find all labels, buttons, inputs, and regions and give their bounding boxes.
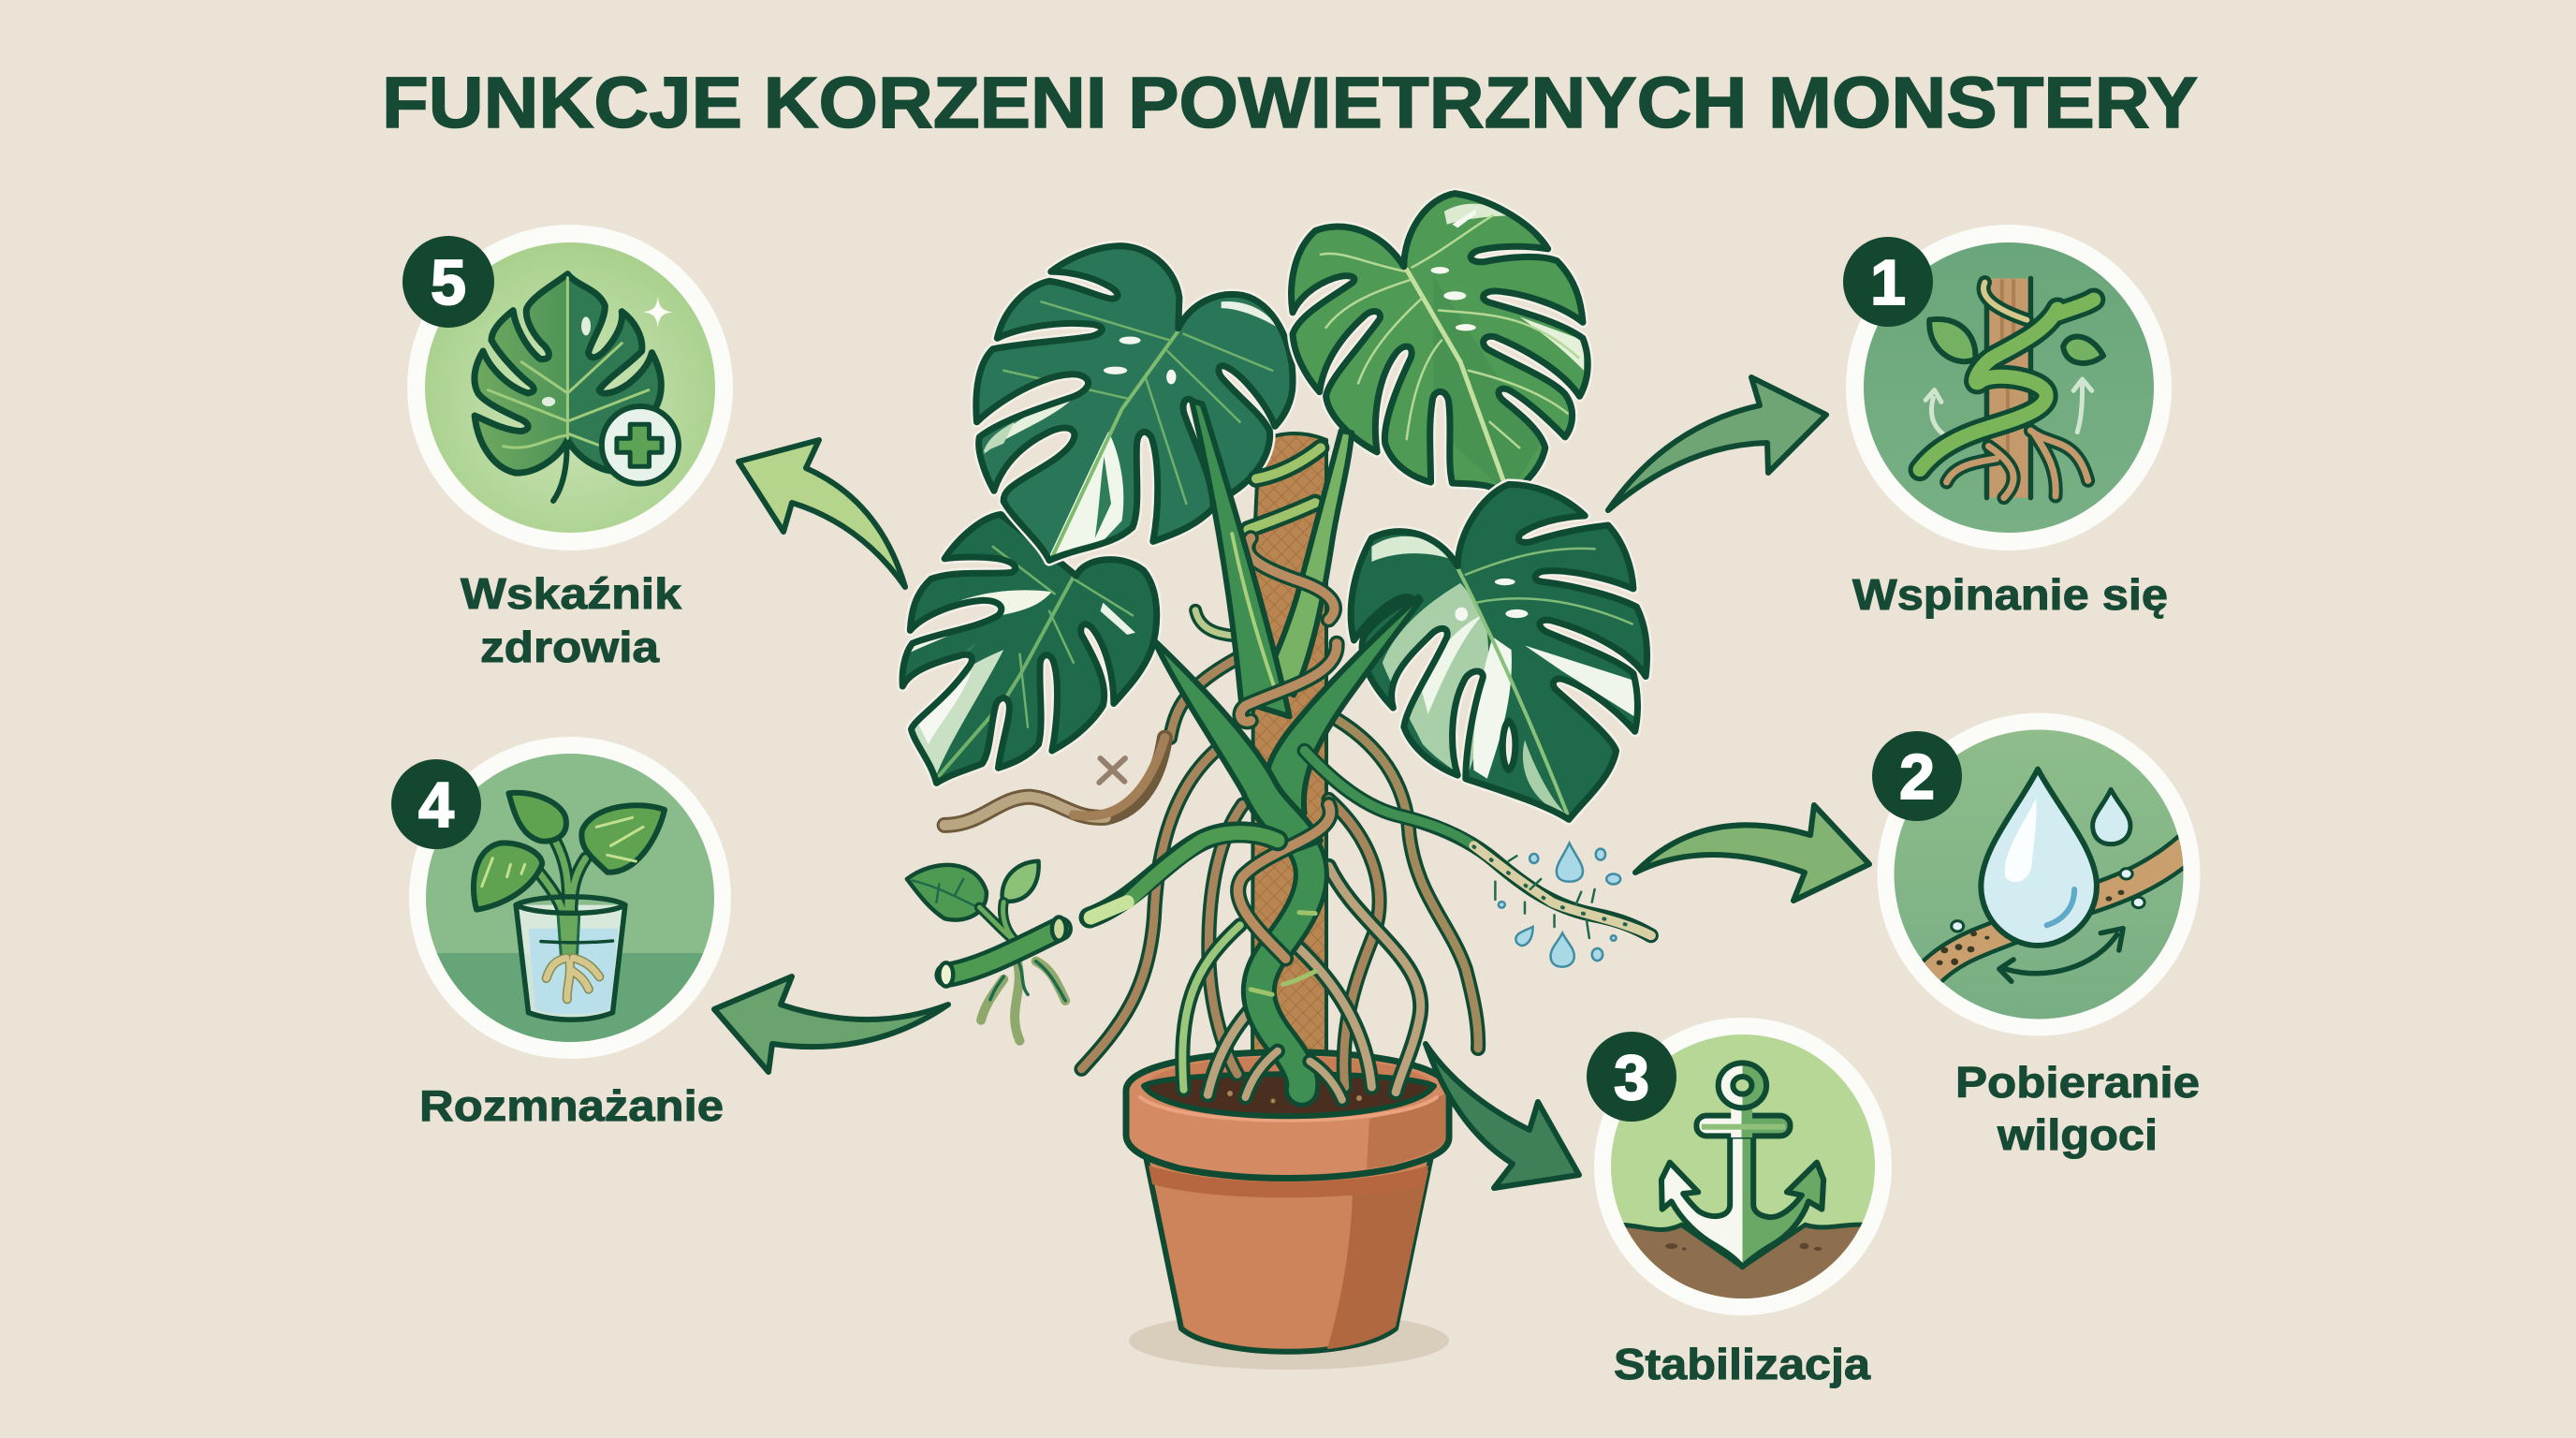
badge 3 [1587,1032,1676,1122]
plus badge [602,406,679,484]
label: Wskaźnik [461,569,681,618]
roots [1947,431,2088,498]
rim inner back [1144,1056,1434,1114]
inner disc [425,242,715,533]
leaf stem [553,443,566,501]
double arrow [1999,929,2123,981]
plant stems [537,841,586,911]
pot body [1146,1156,1431,1352]
soil [1618,1225,1872,1304]
left leaf [1929,319,1975,361]
leaf spots [1455,579,1528,621]
twisted brown root [1238,804,1330,959]
rim shade [1367,1093,1445,1169]
inner disc [426,754,714,1042]
big drop [1981,770,2097,946]
panel 3: stabilization [1587,1018,1892,1388]
icon: leaf with plus [475,274,679,501]
inner disc [1611,1034,1875,1299]
inner disc [1864,242,2154,533]
stem in water [558,913,579,961]
icon drops and arrow [1952,770,2144,981]
pot rim [1126,1052,1449,1178]
label [461,569,681,671]
arrow to 4 [714,976,948,1072]
badge 2 [1872,731,1962,821]
pole [1986,278,2030,498]
badge 4: 4 [418,770,454,841]
anchor stock [1696,1116,1790,1136]
petiole right leaf [1266,597,1421,839]
label: Pobieranie [1955,1058,2200,1107]
small drop [2093,789,2130,844]
leaf top right [1292,194,1588,497]
title: FUNKCJE KORZENI POWIETRZNYCH MONSTERY [382,63,2198,143]
pot body shade [1327,1170,1428,1349]
tapered stem upper [1154,640,1321,854]
pale arrows [1925,379,2092,433]
leaf spots [542,316,591,406]
leaf top left [976,246,1293,562]
icon: vine on pole [1920,278,2103,498]
soil crumbs [1227,1091,1362,1103]
dead root with x mark [944,738,1164,825]
badge 4 [391,759,481,849]
badge 1 [1843,237,1933,327]
dry root [944,738,1164,825]
root bubbles [1952,869,2144,932]
petiole top right leaf [1265,431,1352,695]
table band [436,953,704,1042]
right leaf [2063,337,2103,363]
sparkle [643,297,673,328]
arrow to 2 [1635,805,1869,901]
inner right root [1328,800,1380,1087]
root pores [1937,890,2124,965]
panel 1: climbing [1843,225,2172,619]
glass outline [516,905,625,1020]
small cut root [1195,610,1237,636]
moss pole [1252,433,1326,1091]
panel 5: health indicator [402,225,733,671]
pole wraps and petioles [1192,401,1421,839]
badge 5 [402,236,494,328]
badge 1: 1 [1870,247,1906,318]
drop highlight [2005,799,2036,882]
white ring [407,225,733,550]
root [1925,843,2192,980]
leaf spots [1431,210,1476,331]
leaf 3 [474,843,542,910]
inner left root [1208,804,1243,1074]
soil [1144,1074,1434,1116]
pot shadow [1129,1312,1449,1370]
white ring [1846,225,2172,550]
arrow to 1 [1608,377,1826,510]
label: wilgoci [1997,1110,2158,1159]
icon: cutting in glass [474,793,665,1020]
rim highlight [1140,1097,1437,1121]
drop reflection [2047,889,2074,925]
glass rim [516,897,625,913]
plus sign [617,424,662,466]
back brown wrap [1247,538,1335,620]
panel 4: propagation [391,737,731,1130]
front brown wrap [1240,643,1337,722]
leaf veins [482,817,643,887]
top thin vine [1983,283,2027,320]
lower stems and roots [907,640,1651,1100]
leaf 1 [509,793,566,842]
leaf right variegated [1351,484,1647,819]
white ring [409,737,731,1059]
pale green root [1182,925,1240,1090]
badge 3: 3 [1614,1042,1649,1113]
green wraps on pole [1248,448,1321,530]
badge 5: 5 [431,247,466,318]
icon root clipped [1925,843,2192,980]
white ring [1594,1018,1892,1315]
leaf [475,274,661,473]
petiole highlight [1232,534,1278,697]
arrow to 3 [1426,1044,1579,1188]
water line [541,941,612,943]
x mark [1099,758,1125,783]
root center left [1208,1013,1248,1094]
anchor stock green band [1702,1124,1785,1130]
stem light bands [1251,913,1315,994]
moisture root [1305,751,1651,938]
label: Wspinanie się [1852,570,2168,619]
terracotta pot [1126,1052,1449,1352]
arrow to 5 [739,440,905,587]
water droplets [1499,844,1620,967]
upper arc root [1170,658,1237,738]
anchor body [1661,1136,1823,1267]
label: zdrowia [480,623,659,671]
leaf bottom left [902,514,1157,783]
leaf spots [1104,336,1176,384]
root to soil right [1328,866,1421,1093]
right hanging root [1328,714,1478,1049]
root center right [1299,948,1371,1087]
anchor ring hole [1733,1077,1751,1094]
inner disc [1895,730,2183,1019]
label: Rozmnażanie [419,1081,724,1130]
water [529,929,618,1014]
vine [1920,300,2094,470]
cut stem [1090,832,1278,917]
central plant illustration [902,194,1651,1370]
roots [547,958,599,999]
petiole top left leaf [1192,401,1290,716]
soil root front [1245,1051,1342,1100]
glass back [516,905,625,1020]
leaf veins [488,278,649,448]
label [1955,1058,2200,1159]
back aerial roots [1081,658,1478,1087]
main twisted stem [1259,841,1311,1090]
left hanging root [1081,748,1219,1069]
pole grain and edges [2002,281,2013,487]
shadow under rim [1149,1166,1428,1197]
cutting with leaves [907,861,1066,1041]
anchor ring [1719,1063,1766,1108]
white ring [1878,713,2200,1035]
badge 2: 2 [1899,741,1935,813]
leaf 2 [581,805,665,873]
label: Stabilizacja [1614,1340,1870,1388]
anchor shank top [1731,1098,1752,1137]
icon: anchor [1661,1063,1823,1267]
monstera leaves [902,194,1647,819]
panel 2: moisture uptake [1872,713,2200,1159]
